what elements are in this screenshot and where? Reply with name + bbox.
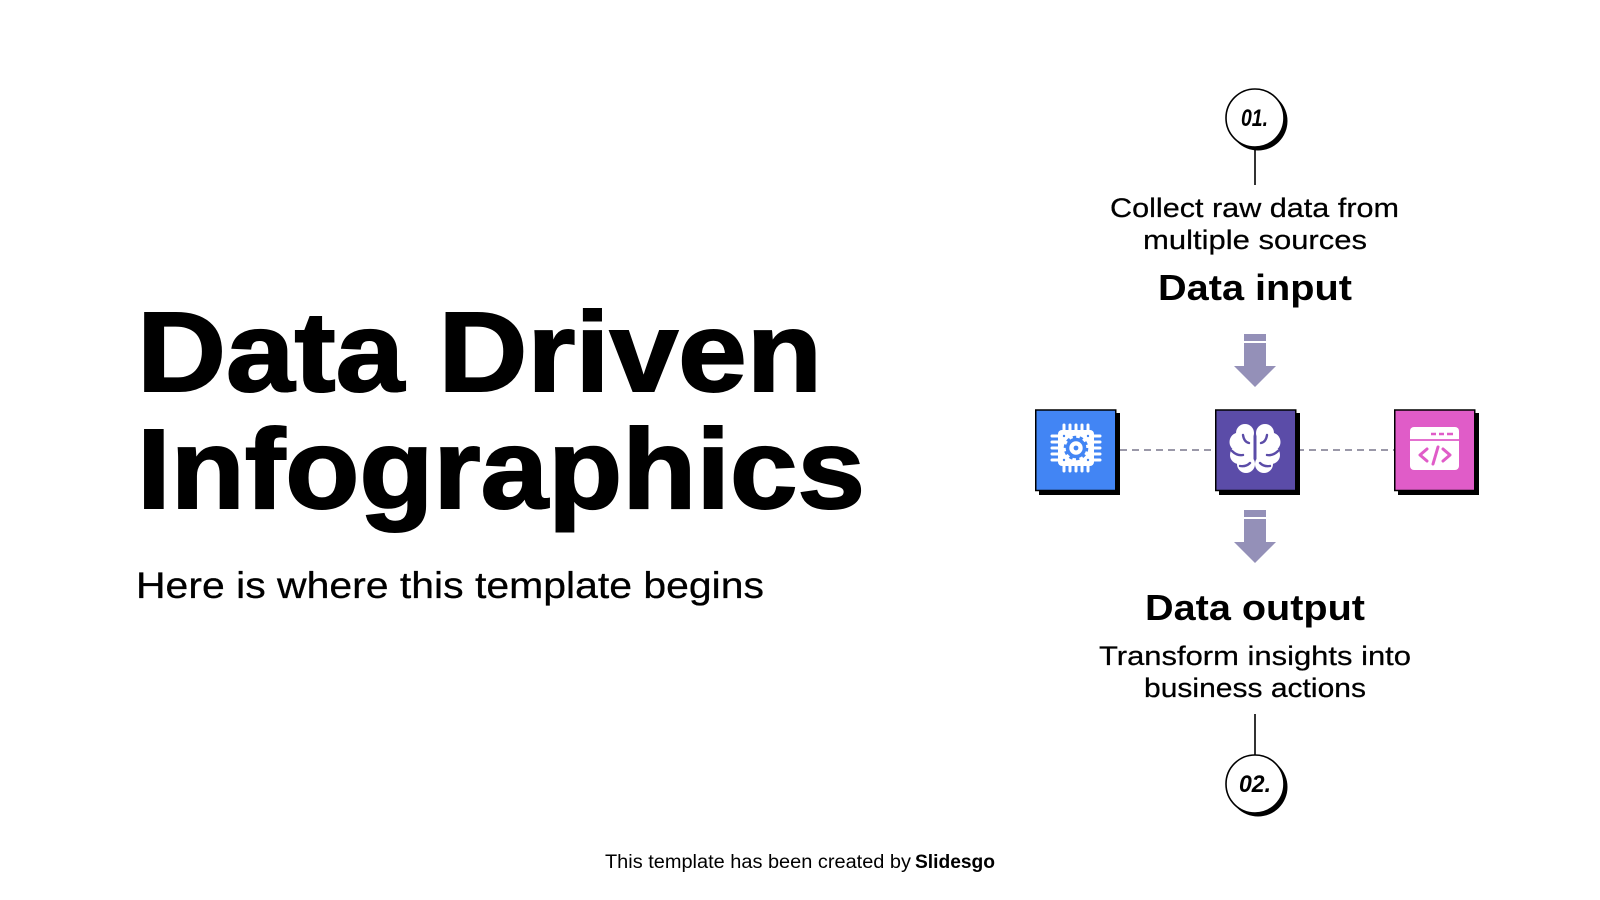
title: Data Driven — [137, 289, 822, 415]
step 1 description: Collect raw data from — [1110, 193, 1399, 223]
step 1 description: multiple sources — [1143, 225, 1367, 255]
step 2 description — [1099, 641, 1411, 703]
title — [137, 289, 865, 532]
dashed connector left — [1120, 449, 1215, 451]
arrow: input to processing — [1234, 334, 1276, 387]
icon: brain — [1216, 410, 1300, 495]
step 2 description: Transform insights into — [1099, 641, 1411, 671]
footer credit: This template has been created by — [605, 852, 912, 873]
subtitle: Here is where this template begins — [136, 565, 764, 606]
step marker 02: 02. — [1239, 771, 1271, 798]
step marker 01 — [1226, 89, 1288, 185]
dashed connector right — [1297, 449, 1394, 451]
step 2 description: business actions — [1144, 673, 1366, 703]
step 1 description — [1110, 193, 1399, 255]
title: Infographics — [137, 406, 865, 532]
icon: code window — [1395, 410, 1479, 495]
icon: chip with gear — [1036, 410, 1120, 495]
step marker 02 — [1226, 714, 1288, 816]
step marker 01: 01. — [1241, 105, 1268, 132]
footer credit: Slidesgo — [915, 852, 995, 873]
arrow: processing to output — [1234, 510, 1276, 563]
heading: data output: Data output — [1145, 587, 1365, 628]
heading: data input: Data input — [1158, 267, 1352, 308]
